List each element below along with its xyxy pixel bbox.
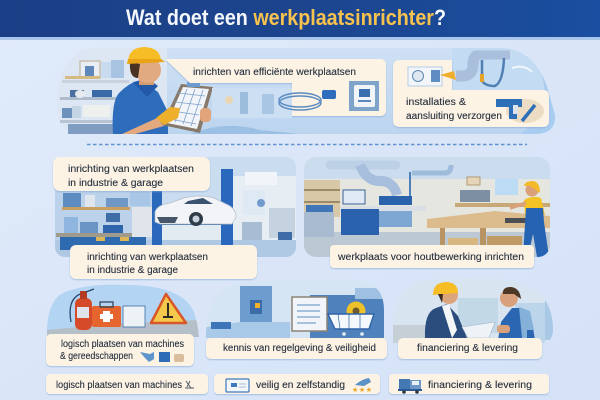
text card: industry bottom: [70, 245, 257, 279]
text card: woodworking: [330, 245, 534, 268]
label strip: safe and independent: veilig en zelfstandig: [256, 380, 345, 391]
panel: woodworking: [304, 157, 550, 268]
illustration: car on lift: [155, 196, 236, 226]
text card: woodworking: werkplaats voor houtbewerking inrichten: [337, 252, 524, 263]
icon: valve and tool: [496, 99, 544, 123]
divider line: [87, 144, 527, 146]
text card: installations: installaties &: [406, 97, 466, 108]
text card: industry top: inrichting van werkplaatsen: [68, 164, 194, 175]
illustration: extinguisher, first aid kit, warning sign: [47, 283, 199, 338]
illustration: woodworking workshop: [304, 157, 550, 257]
icon: id card: [226, 379, 249, 392]
illustration: worker with clipboard: [113, 47, 213, 134]
text card: efficient workshops: [165, 59, 386, 116]
text card: efficient workshops: inrichten van efficiënte werkplaatsen: [193, 67, 356, 78]
illustration: factory, checklist and cart: [206, 286, 384, 338]
panel: safety equipment and placement: [46, 283, 199, 366]
label strip: logical placement: logisch plaatsen van machines: [56, 380, 182, 391]
text card: regulations: [206, 338, 387, 359]
illustration: consultant and worker: [393, 278, 553, 343]
text card: industry top: [53, 157, 210, 191]
illustration: shelves: [60, 60, 129, 134]
text card: logical placement: & gereedschappen: [60, 351, 133, 362]
text card: industry bottom: inrichting van werkplaatsen: [87, 252, 208, 263]
panel: efficient workshops and installations: [57, 47, 557, 134]
label strip: financing and delivery: [389, 374, 549, 394]
icon: duct and hose: [456, 54, 532, 86]
icon: hand and stars: ★★★: [352, 386, 372, 394]
title: Wat doet een werkplaatsinrichter?: [126, 5, 446, 30]
icon: hose and plug: [279, 90, 336, 110]
text card: logical placement: logisch plaatsen van machines: [61, 339, 184, 350]
panel background: [57, 48, 557, 134]
label strip: financing and delivery: financiering & levering: [428, 380, 532, 391]
panel: financing and delivery: [393, 278, 553, 359]
clipboard: [162, 82, 213, 133]
icon: tool glyph: [185, 381, 194, 388]
text card: industry bottom: in industrie & garage: [87, 265, 178, 276]
illustration: garage scene: [55, 157, 296, 257]
label strip: logical placement: [46, 374, 208, 394]
icon: control panel: [349, 81, 379, 111]
text card: logical placement: [46, 334, 194, 366]
header banner: [0, 0, 600, 40]
panel: industry and garage: [53, 157, 296, 279]
text card: industry top: in industrie & garage: [68, 178, 163, 189]
text card: financing: [398, 338, 542, 359]
text card: installations: [393, 60, 549, 127]
icon: hand and stars: [352, 378, 372, 394]
illustration: workshop background: [212, 88, 292, 118]
icon: delivery truck: [398, 379, 422, 394]
panel: regulations and safety: [206, 280, 387, 359]
label strip: safe and independent: [214, 374, 380, 394]
icon: gauge panel and pencil: [408, 67, 456, 86]
text card: financing: financiering & levering: [417, 343, 518, 354]
icon: small tools: [140, 352, 184, 362]
text card: regulations: kennis van regelgeving & veiligheid: [223, 343, 376, 354]
text card: installations: aansluiting verzorgen: [406, 111, 502, 122]
